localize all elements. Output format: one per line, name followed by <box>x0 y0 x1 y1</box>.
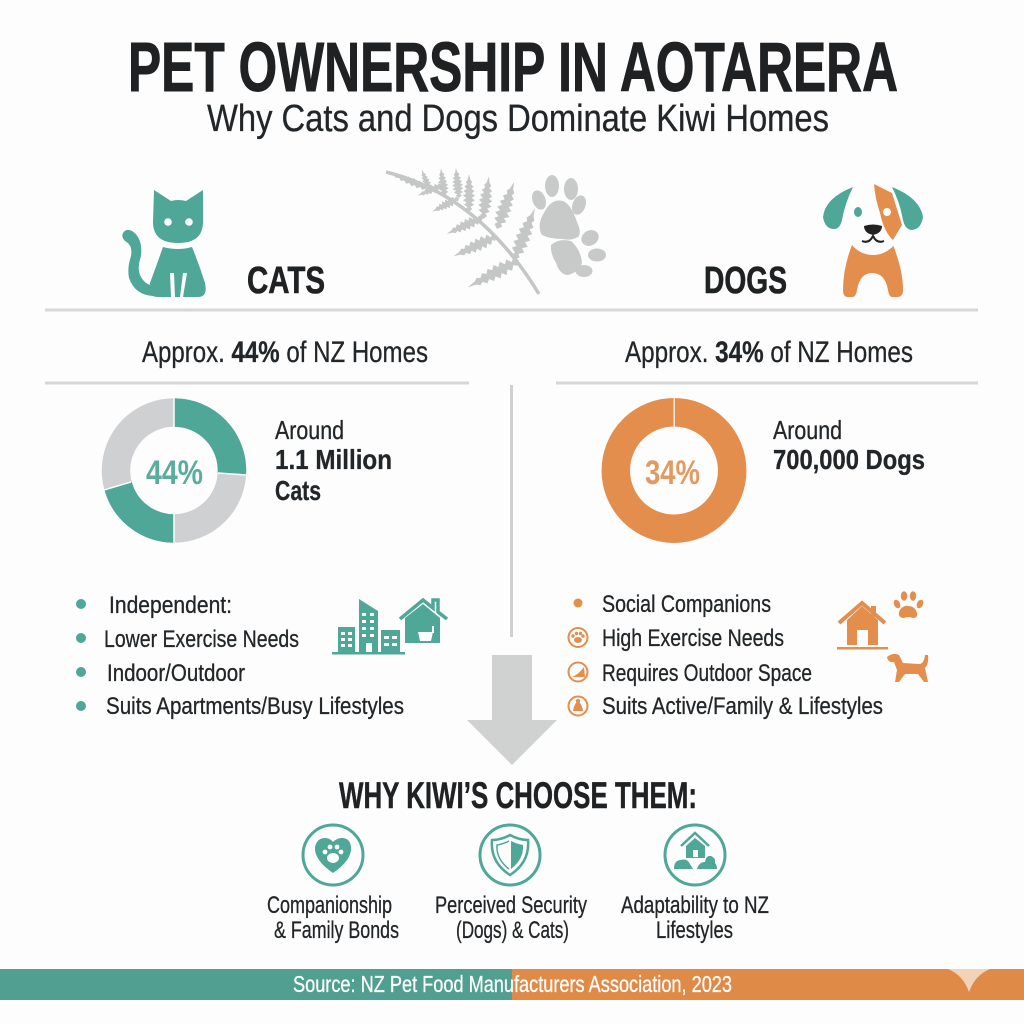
dogs population: Around <box>773 415 842 445</box>
cat traits list: Independent: <box>109 592 232 619</box>
reason: companionship <box>267 825 399 944</box>
top divider <box>45 308 978 312</box>
dog traits list <box>568 591 883 720</box>
dogs population: 700,000 Dogs <box>773 444 925 475</box>
icon: heart paw <box>303 825 363 885</box>
cats heading: CATS <box>247 260 325 302</box>
left section divider <box>45 382 469 384</box>
reason: companionship: & Family Bonds <box>274 917 399 944</box>
reason: companionship: Companionship <box>267 892 392 919</box>
icon: shield <box>480 825 540 885</box>
section heading: WHY KIWI’S CHOOSE THEM: <box>339 775 697 816</box>
dogs share statement: Approx. 34% of NZ Homes <box>625 336 913 369</box>
cats share statement: Approx. 44% of NZ Homes <box>142 336 428 369</box>
reason: security <box>435 825 587 944</box>
icon: paw prints <box>529 175 606 277</box>
centre vertical divider <box>510 385 513 637</box>
source: Source: NZ Pet Food Manufacturers Association, 2023 <box>293 971 732 997</box>
icon: cat <box>122 190 206 297</box>
subtitle: Why Cats and Dogs Dominate Kiwi Homes <box>207 98 829 140</box>
icon: family <box>568 696 588 716</box>
icon: silver fern <box>386 168 542 294</box>
icon: dog <box>823 184 923 297</box>
dogs heading: DOGS <box>704 260 787 302</box>
icon: house, paw and dog <box>837 591 928 682</box>
icon: exercise paw <box>568 628 588 647</box>
reason: security: Perceived Security <box>435 892 587 919</box>
footer band <box>0 969 1024 1000</box>
cats population: Cats <box>275 475 321 506</box>
dog traits list: Social Companions <box>602 591 771 618</box>
reason: adaptability: Lifestyles <box>656 917 733 944</box>
dogs donut value: 34% <box>645 454 700 492</box>
cat traits list <box>76 592 404 720</box>
cats donut chart <box>104 398 246 543</box>
cats population: Around <box>275 415 344 445</box>
cat traits list: Suits Apartments/Busy Lifestyles <box>106 693 404 720</box>
reason: adaptability: Adaptability to NZ <box>621 892 769 919</box>
cats population <box>275 415 392 506</box>
right section divider <box>556 382 978 384</box>
dogs population <box>773 415 925 475</box>
dog traits list: Requires Outdoor Space <box>602 660 812 687</box>
icon: home and bushes <box>665 825 725 885</box>
dog traits list: High Exercise Needs <box>602 625 784 652</box>
arrow <box>467 655 557 765</box>
icon: outdoor hill <box>568 662 588 682</box>
cats donut value: 44% <box>146 454 203 492</box>
dogs donut chart <box>616 398 732 529</box>
cats population: 1.1 Million <box>275 444 392 475</box>
icon: apartments and house <box>332 599 447 654</box>
cat traits list: Lower Exercise Needs <box>104 626 299 653</box>
reason: security: (Dogs) & Cats) <box>456 917 569 944</box>
cat traits list: Indoor/Outdoor <box>107 660 245 687</box>
reason: adaptability <box>621 825 769 944</box>
dog traits list: Suits Active/Family & Lifestyles <box>602 693 883 720</box>
